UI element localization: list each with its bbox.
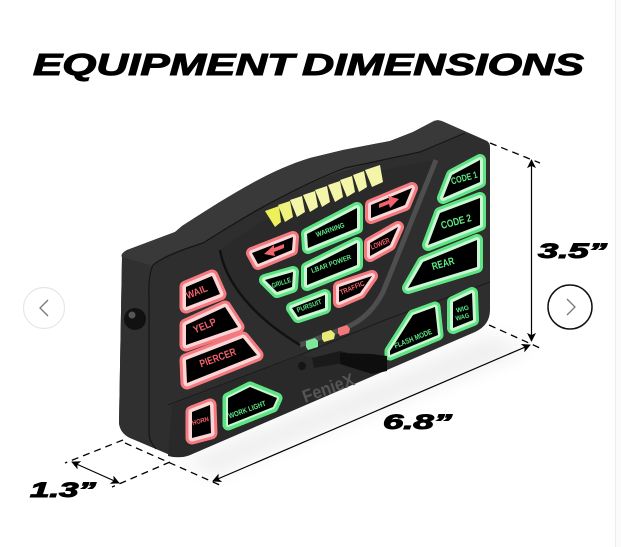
dimension: depth: [65, 440, 170, 487]
cable connector: [312, 351, 387, 374]
center bowl: [220, 160, 436, 344]
button: horn: HORN: [191, 416, 210, 427]
button: rear: REAR: [430, 255, 456, 273]
button: yelp: [186, 307, 238, 345]
button: wig wag: WAG: [455, 312, 470, 323]
button: code 2: [428, 198, 480, 245]
button: horn: [191, 405, 211, 438]
button: pursuit: [292, 295, 325, 317]
LED bar row: [265, 165, 383, 227]
carousel button: next: [548, 285, 592, 329]
bottom edge: [168, 282, 490, 405]
floor shadow: [180, 335, 530, 475]
button: code 1: CODE 1: [450, 170, 479, 187]
top rim: [122, 120, 487, 266]
carousel button: previous: [24, 288, 64, 328]
label: 3.5 inch: 3.5”: [538, 240, 608, 263]
label: 6.8 inch: 6.8”: [383, 411, 453, 434]
button: grille: GRILLE: [271, 277, 292, 290]
screw: [298, 362, 306, 370]
button: warning: [307, 208, 357, 248]
button: wig wag: WIG: [455, 305, 470, 315]
button: flash mode: [390, 307, 438, 355]
button: grille: [265, 272, 293, 292]
button: right arrow: [371, 188, 412, 218]
side knob: [124, 308, 146, 330]
button: rear: [408, 240, 477, 288]
dimension: height: [489, 143, 540, 348]
control panel device: [119, 120, 490, 457]
button: flash mode: FLASH MODE: [393, 327, 433, 350]
button: traffic: TRAFFIC: [339, 280, 366, 297]
button: lbar power: LBAR POWER: [311, 254, 352, 275]
button: work light: WORK LIGHT: [227, 399, 267, 421]
button: lower: [369, 227, 398, 256]
button: code 1: [443, 160, 480, 198]
button: piercer: [186, 338, 257, 383]
title: [33, 48, 585, 82]
button: piercer: PIERCER: [198, 346, 238, 370]
button: warning: WARNING: [315, 222, 346, 239]
button: yelp: YELP: [192, 316, 218, 336]
button: wail: [185, 276, 220, 307]
side panel: [119, 257, 153, 440]
status LEDs: [306, 325, 350, 350]
title: DIMENSIONS: [302, 48, 585, 82]
button: wail: WAIL: [185, 283, 209, 302]
button: code 2: CODE 2: [440, 212, 473, 232]
device body: [119, 120, 490, 457]
button: traffic: [339, 276, 372, 302]
button: work light: [227, 387, 277, 425]
button: lbar power: [307, 243, 357, 285]
label: 1.3 inch: 1.3”: [30, 479, 97, 502]
button: pursuit: PURSUIT: [296, 299, 323, 314]
brand logo: FenieX: [300, 369, 357, 407]
dimension: width: [125, 345, 530, 486]
button: lower: LOWER: [369, 236, 391, 252]
button: wig wag: [453, 293, 473, 328]
button: left arrow: [252, 237, 293, 264]
title: EQUIPMENT: [33, 48, 297, 82]
